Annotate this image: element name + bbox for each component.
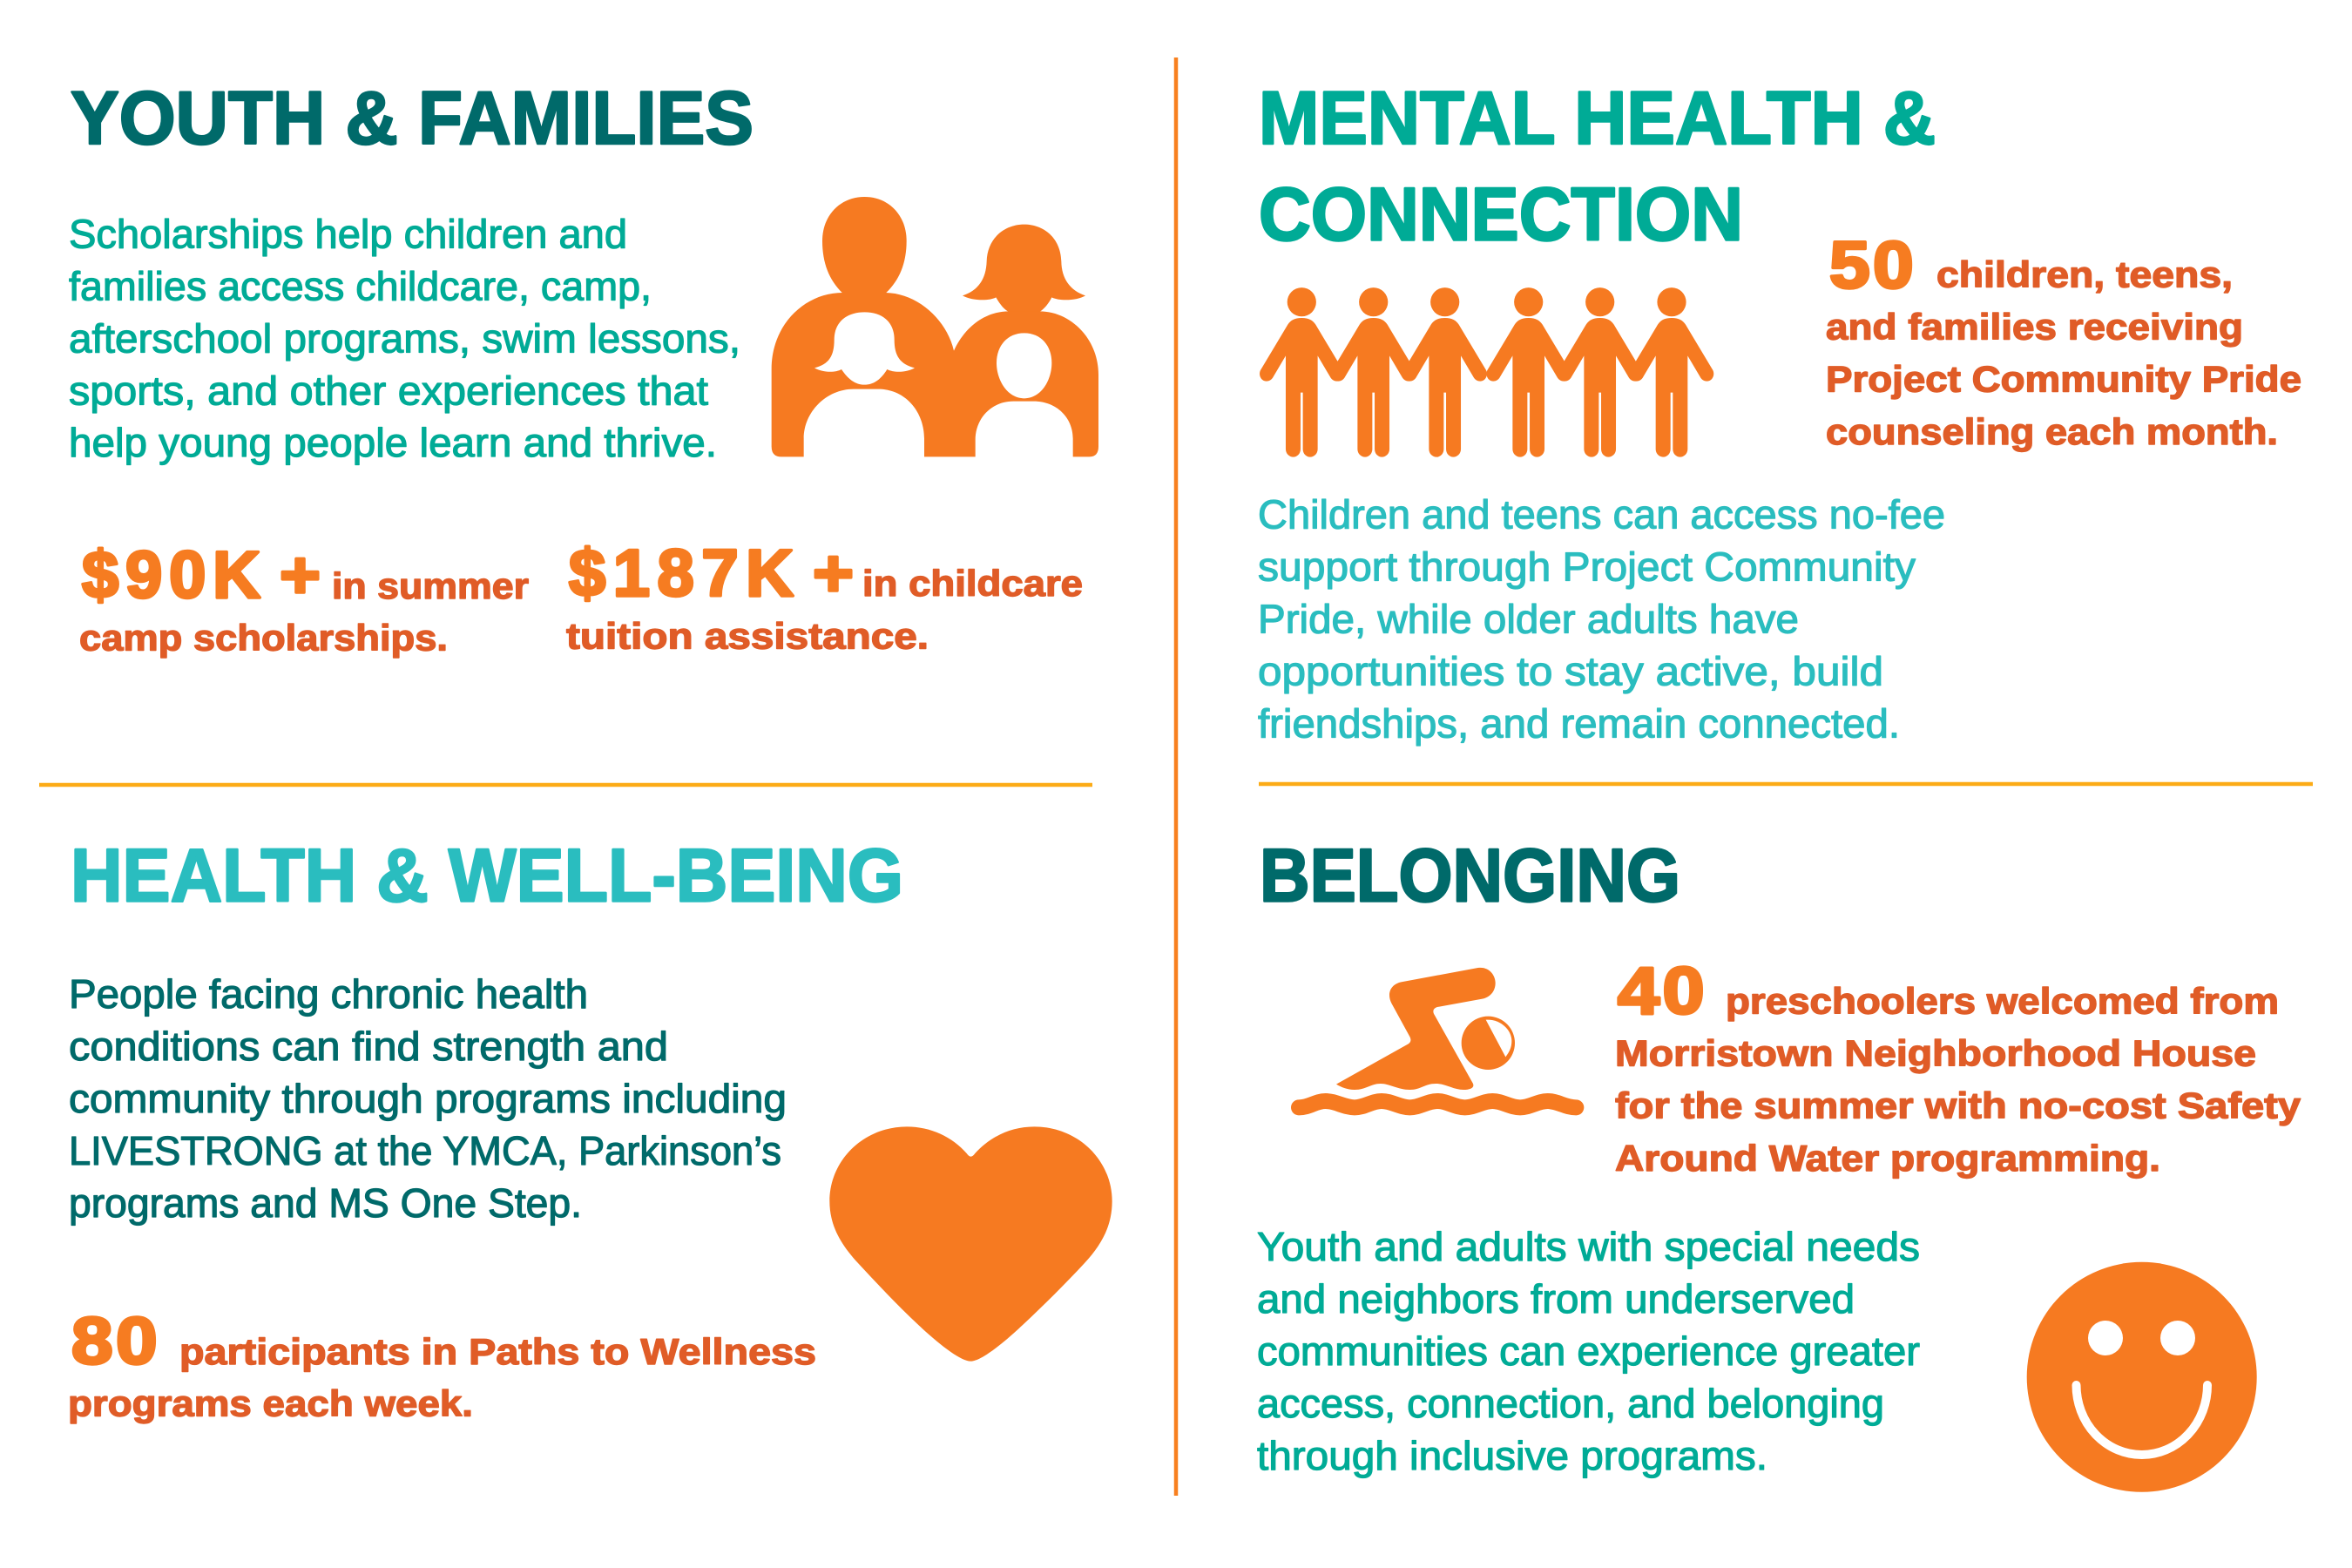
icon: row of people holding hands: [1260, 287, 1713, 457]
icon: swimmer: [1299, 968, 1576, 1107]
text block: scholarships: help young people learn and thrive.: [69, 420, 717, 465]
text block: chronic health programs: programs and MS One Step.: [69, 1180, 582, 1226]
stat: 90K summer camp: [79, 538, 529, 659]
text block: no-fee support: opportunities to stay active, build: [1258, 648, 1883, 693]
stat: 187K childcare: $187K: [569, 537, 794, 611]
panel: youth and families: [69, 77, 1098, 659]
text block: chronic health programs: [69, 971, 787, 1226]
heading: youth and families: YOUTH & FAMILIES: [71, 77, 754, 160]
stat: 50 counseling: 50: [1829, 228, 1916, 303]
text block: chronic health programs: community through programs including: [69, 1076, 787, 1121]
text block: chronic health programs: LIVESTRONG at the YMCA, Parkinson’s: [69, 1128, 781, 1173]
stat: 40 preschoolers: 40: [1618, 955, 1707, 1028]
panel: mental health and connection: [1258, 77, 2301, 746]
text block: no-fee support: friendships, and remain connected.: [1258, 700, 1900, 746]
stat: 80 participants: programs each week.: [68, 1383, 473, 1423]
text block: no-fee support: Pride, while older adults have: [1258, 596, 1799, 641]
stat: 80 participants: participants in Paths to Wellness: [179, 1331, 816, 1372]
text block: scholarships: Scholarships help children and: [69, 211, 627, 256]
text block: special needs: Youth and adults with special needs: [1257, 1224, 1920, 1269]
text block: chronic health programs: conditions can find strength and: [69, 1024, 668, 1069]
stat: 50 counseling: Project Community Pride: [1826, 359, 2301, 399]
stat: 50 counseling: [1826, 228, 2301, 452]
stat: 40 preschoolers: for the summer with no-cost Safety: [1615, 1085, 2301, 1125]
icon: smiley face: [2027, 1262, 2257, 1492]
text block: no-fee support: [1258, 491, 1945, 746]
heading: mental health and connection: MENTAL HEALTH &: [1259, 77, 1936, 160]
stat: 90K summer camp: $90K: [82, 538, 260, 612]
stat: 187K childcare: [566, 537, 1083, 657]
stat: 80 participants: [68, 1305, 816, 1423]
text block: special needs: access, connection, and belonging: [1257, 1381, 1884, 1426]
stat: 80 participants: 80: [71, 1305, 160, 1378]
stat: 40 preschoolers: Around Water programming.: [1615, 1138, 2160, 1179]
heading: mental health and connection: CONNECTION: [1259, 172, 1743, 256]
stat: 50 counseling: children, teens,: [1936, 254, 2233, 294]
stat: 40 preschoolers: preschoolers welcomed from: [1726, 981, 2279, 1021]
panel: health and well-being: [68, 835, 1112, 1423]
stat: 90K summer camp: +: [280, 538, 321, 612]
text block: special needs: [1257, 1224, 1920, 1478]
text block: scholarships: sports, and other experiences that: [69, 368, 708, 413]
heading: health and well-being: HEALTH & WELL-BEING: [71, 835, 903, 918]
text block: scholarships: [69, 211, 740, 465]
stat: 40 preschoolers: Morristown Neighborhood House: [1615, 1033, 2256, 1073]
stat: 50 counseling: counseling each month.: [1826, 411, 2278, 452]
text block: no-fee support: Children and teens can access no-fee: [1258, 491, 1945, 537]
icon: family: [772, 197, 1098, 456]
stat: 187K childcare: tuition assistance.: [566, 615, 929, 657]
stat: 187K childcare: in childcare: [862, 563, 1083, 604]
text block: special needs: communities can experience greater: [1257, 1328, 1920, 1374]
stat: 40 preschoolers: [1615, 955, 2301, 1179]
text block: chronic health programs: People facing chronic health: [69, 971, 588, 1017]
text block: no-fee support: support through Project Community: [1258, 544, 1916, 589]
text block: scholarships: afterschool programs, swim lessons,: [69, 315, 740, 361]
heading: mental health and connection: [1259, 77, 1936, 256]
text block: special needs: and neighbors from underserved: [1257, 1276, 1855, 1321]
stat: 50 counseling: and families receiving: [1826, 307, 2243, 347]
stat: 187K childcare: +: [813, 537, 854, 611]
text block: special needs: through inclusive programs.: [1257, 1433, 1767, 1478]
panel: belonging: [1257, 835, 2301, 1492]
stat: 90K summer camp: in summer: [332, 565, 529, 606]
stat: 90K summer camp: camp scholarships.: [79, 617, 448, 659]
icon: heart: [829, 1126, 1112, 1362]
heading: belonging: BELONGING: [1260, 835, 1680, 918]
text block: scholarships: families access childcare, camp,: [69, 263, 652, 308]
